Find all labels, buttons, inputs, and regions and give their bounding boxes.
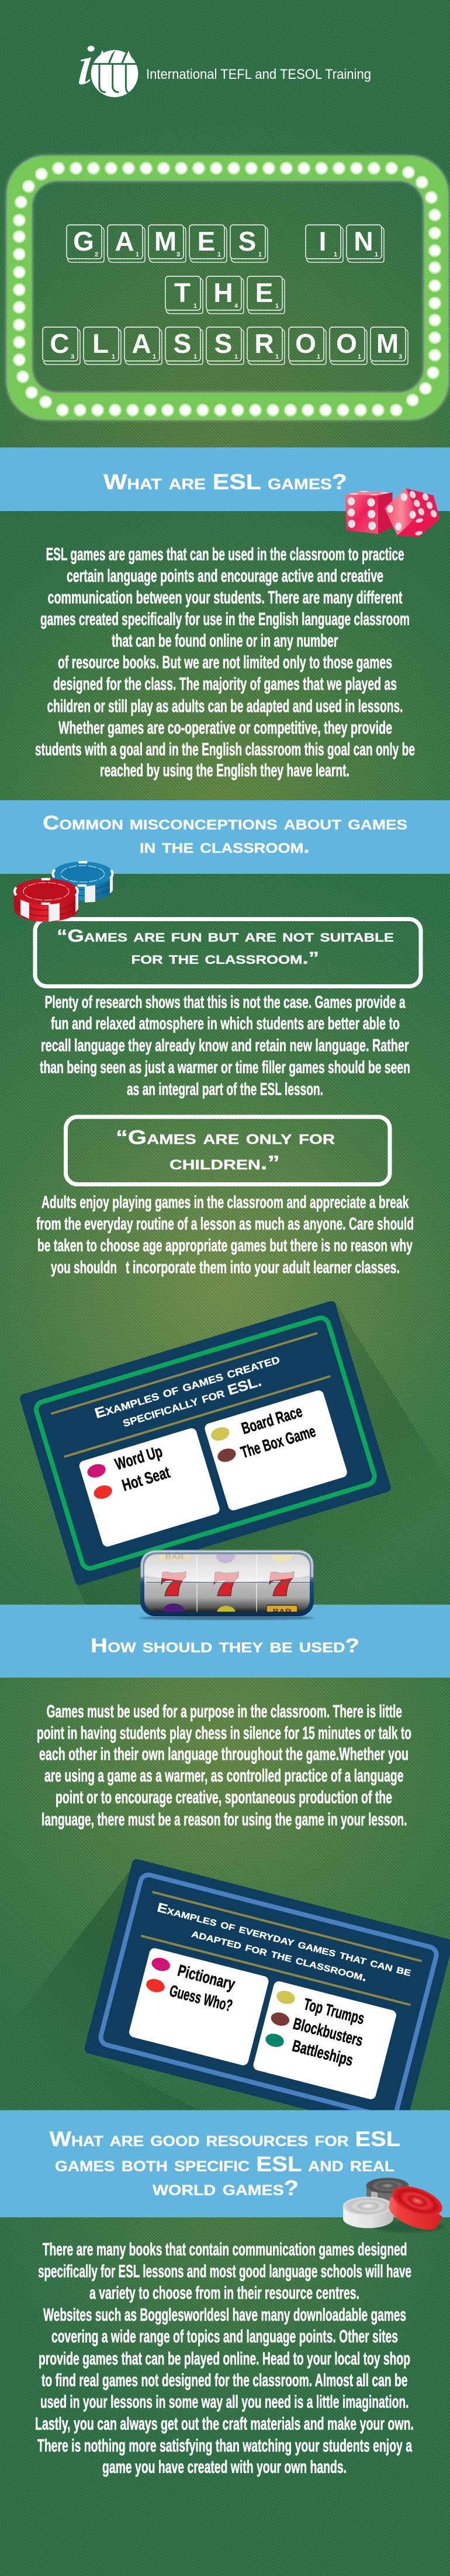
icon: dice [345, 488, 440, 537]
quote text 1: for the classroom.” [131, 949, 319, 968]
heading: misconceptions: Common misconceptions about games [43, 812, 407, 834]
blue chip [53, 862, 113, 902]
title: scrabble tiles: I [319, 226, 326, 256]
panel: right list [203, 1389, 348, 1512]
title: scrabble tiles: S [238, 226, 256, 256]
icon: checkers [343, 2178, 446, 2233]
panel: right list two: Top Trumps [302, 1995, 366, 2028]
icon: slot machine [139, 1549, 314, 1620]
background: ESL games section [0, 508, 450, 803]
quote text 2: children.” [169, 1152, 280, 1174]
icon: poker chips [14, 862, 113, 922]
title: scrabble tiles: 1 [193, 353, 197, 360]
card: everyday games [84, 1858, 450, 2134]
heading: What are ESL games: What are ESL games? [103, 470, 347, 494]
background: how should they be used section [0, 1675, 450, 2113]
title: scrabble tiles: 3 [176, 251, 180, 258]
band: What are ESL games [0, 447, 450, 511]
title: scrabble tiles: S [174, 328, 191, 359]
card shadow two [0, 1866, 199, 2110]
logo: ITTT [79, 46, 371, 97]
title: scrabble tiles: 1 [358, 353, 361, 360]
card shadow [77, 1300, 450, 1605]
panel: left list two: Guess Who? [168, 1981, 234, 2015]
text block: adults enjoy: you shouldn [51, 1258, 117, 1277]
card heading two: Examples of everyday games that can be [155, 1900, 413, 1979]
title: scrabble tiles: 4 [234, 303, 238, 310]
white checker [343, 2197, 393, 2228]
text block: plenty of research [40, 993, 410, 1099]
title: scrabble tiles [43, 225, 408, 364]
panel: right list two: Blockbusters [291, 2015, 365, 2050]
text block: what are ESL games [35, 544, 415, 780]
title: scrabble tiles: 1 [217, 251, 221, 258]
text block: good resources [35, 2239, 414, 2477]
quote box 1 [35, 919, 421, 986]
heading: misconceptions: in the classroom. [140, 835, 310, 857]
title: scrabble tiles: G [73, 226, 94, 256]
reel symbols: BAR [165, 1553, 184, 1561]
title: scrabble tiles: 1 [334, 251, 337, 258]
quote text 2: “Games are only for [116, 1127, 335, 1149]
text block: how should they be used [37, 1701, 411, 1829]
text block: plenty of research: as an integral part of the ESL lesson. [127, 1079, 323, 1099]
background: misconceptions section [0, 870, 450, 1608]
title: scrabble tiles: A [131, 328, 151, 359]
panel: left list two [128, 1947, 269, 2067]
heading: how should they be used: How should they be used? [91, 1635, 359, 1657]
title: scrabble tiles: 1 [234, 353, 238, 360]
marquee lights [13, 162, 441, 416]
heading: good resources: games both specific ESL and real [55, 2152, 394, 2176]
title: scrabble tiles: 3 [399, 353, 402, 360]
heading: good resources [49, 2127, 400, 2200]
red chip [14, 879, 78, 922]
logo text: International TEFL and TESOL Training [146, 67, 371, 82]
reel symbols: BAR [272, 1608, 292, 1616]
title: scrabble tiles: H [213, 277, 233, 308]
title: scrabble tiles: M [154, 226, 176, 256]
die two [384, 488, 440, 537]
title: scrabble tiles: E [198, 226, 215, 256]
panel: left list: Hot Seat [120, 1463, 172, 1495]
title: scrabble tiles: 1 [112, 353, 115, 360]
quote box 2 [65, 1117, 390, 1185]
sevens [161, 1571, 294, 1596]
panel: left list two: Pictionary [176, 1961, 237, 1994]
title: scrabble tiles: 1 [153, 353, 156, 360]
title: scrabble tiles: 1 [136, 251, 139, 258]
dark checker [366, 2178, 409, 2203]
marquee frame [8, 157, 448, 419]
card heading two: adapted for the classroom. [190, 1925, 369, 1984]
title: scrabble tiles: O [295, 328, 316, 359]
background: top section [0, 0, 450, 450]
title: scrabble tiles: T [174, 277, 191, 308]
band: how should they be used [0, 1605, 450, 1678]
panel: left list [78, 1427, 221, 1548]
card heading: specifically for ESL. [120, 1373, 264, 1431]
title: scrabble tiles: N [354, 226, 373, 256]
heading: misconceptions [43, 812, 407, 857]
panel: right list: Board Race [239, 1402, 304, 1438]
title: scrabble tiles: S [214, 328, 232, 359]
panel: right list two [252, 1980, 397, 2101]
title: scrabble tiles: 1 [375, 251, 378, 258]
panel: left list: Word Up [113, 1442, 164, 1473]
icon: ittt mark [79, 46, 138, 97]
quote text 2 [116, 1127, 335, 1174]
title: scrabble tiles: 1 [275, 353, 279, 360]
title: scrabble tiles: 1 [317, 353, 320, 360]
title: scrabble tiles: A [115, 226, 134, 256]
card heading two [157, 1903, 411, 1981]
title: scrabble tiles: 1 [193, 303, 197, 310]
title: scrabble tiles: 3 [71, 353, 74, 360]
die one [345, 491, 393, 534]
title: scrabble tiles: R [254, 328, 274, 359]
title: scrabble tiles: M [376, 328, 399, 359]
red checker [389, 2181, 446, 2230]
title: scrabble tiles: 1 [258, 251, 262, 258]
heading: good resources: world games? [153, 2176, 299, 2200]
title: scrabble tiles: 2 [95, 251, 98, 258]
background: resources section [0, 2214, 450, 2576]
card heading [93, 1351, 286, 1438]
reel symbols [159, 1554, 298, 1612]
title: scrabble tiles: O [336, 328, 357, 359]
heading: good resources: What are good resources for ESL [49, 2127, 400, 2151]
card: games created for ESL [19, 1300, 392, 1586]
quote text 1: “Games are fun but are not suitable [57, 926, 394, 946]
title: scrabble tiles: 1 [275, 303, 279, 310]
quote text 1 [57, 926, 394, 968]
title: scrabble tiles: E [255, 277, 273, 308]
title: scrabble tiles: L [92, 328, 109, 359]
card heading: Examples of games created [93, 1351, 282, 1422]
title: scrabble tiles: C [50, 328, 70, 359]
band: good resources [0, 2110, 450, 2217]
panel: right list two: Battleships [290, 2036, 355, 2070]
text block: adults enjoy [36, 1193, 414, 1277]
panel: right list: The Box Game [238, 1422, 318, 1461]
band: misconceptions [0, 800, 450, 874]
